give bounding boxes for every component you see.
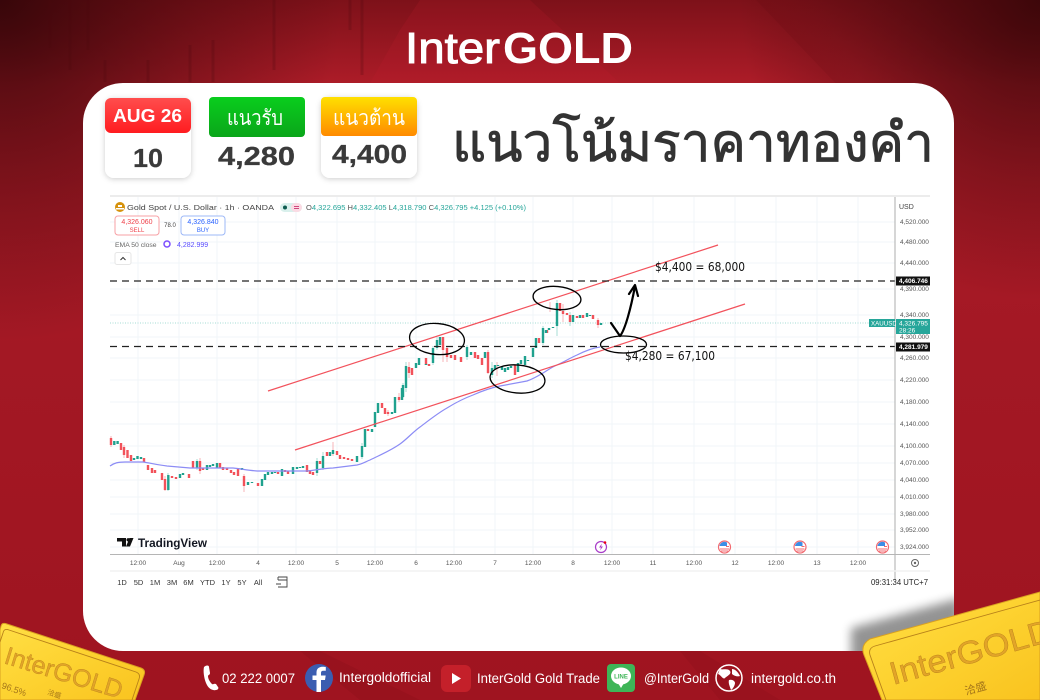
chart: gold price: [110, 195, 930, 587]
logo: InterGOLD: [405, 24, 633, 73]
logo: InterGOLD: Inter: [405, 24, 500, 73]
phone number: 02 222 0007: [222, 671, 295, 686]
time axis: 12:00: [604, 560, 621, 567]
price axis: XAUUSD: [871, 320, 897, 328]
legend: symbol and OHLC: [115, 202, 526, 212]
sell box: [115, 216, 159, 235]
time axis: Aug: [173, 560, 185, 567]
resistance dashed line: [110, 280, 895, 282]
time axis: 13: [813, 560, 821, 567]
time axis: 6: [414, 560, 418, 567]
footer: contact bar: [204, 664, 836, 692]
facebook handle: Intergoldofficial: [339, 670, 431, 685]
gold bar: right: InterGOLD: [885, 612, 1040, 692]
title: แนวโน้มราคาทองคำ: [452, 113, 934, 173]
candle bodies: bullish: [114, 303, 601, 490]
price axis: 4,220.000: [900, 377, 929, 384]
price axis: 4,281.979: [899, 344, 928, 351]
time axis: 12:00: [209, 560, 226, 567]
range selector: 1Y: [221, 578, 231, 587]
gold bar shadow: [844, 594, 954, 651]
price axis: 4,180.000: [900, 399, 929, 406]
icon: phone: [204, 666, 218, 690]
badge: support: แนวรับ: [227, 107, 283, 130]
badge: support: [209, 97, 305, 171]
buy box: 4,326.840: [187, 219, 219, 226]
price axis: [869, 197, 930, 580]
price axis: 4,340.000: [900, 312, 929, 319]
icon: facebook: [305, 664, 333, 692]
circled touch points: [408, 284, 646, 395]
price axis: 4,100.000: [900, 443, 929, 450]
legend: symbol and OHLC: Gold Spot / U.S. Dollar · 1h · OANDA: [127, 203, 275, 212]
collapse button: [115, 252, 131, 264]
line id: @InterGold: [644, 671, 709, 686]
youtube channel: InterGold Gold Trade: [477, 671, 600, 686]
candle bodies: bearish: [111, 303, 598, 490]
time axis: 12:00: [850, 560, 867, 567]
gold bar: right: 洽盛: [963, 679, 988, 698]
badge: resistance: 4,400: [332, 139, 407, 169]
price axis: 3,980.000: [900, 511, 929, 518]
EMA legend: 4,282.999: [177, 242, 208, 249]
badge: resistance: [321, 97, 417, 178]
icon: youtube: [441, 665, 471, 692]
support dashed line: [110, 346, 895, 348]
price axis: 4,406.746: [899, 278, 928, 285]
range selector: 1D: [117, 578, 127, 587]
price axis: 3,924.000: [900, 544, 929, 551]
badge: resistance: แนวต้าน: [333, 107, 405, 130]
label: support: $4,280 = 67,100: [625, 349, 715, 363]
range selector: 6M: [183, 578, 194, 587]
EMA legend: EMA 50 close: [115, 242, 157, 249]
range selector: [117, 577, 287, 587]
time axis: 12:00: [686, 560, 703, 567]
logo: InterGOLD: GOLD: [503, 24, 633, 73]
icon: globe: [716, 665, 742, 691]
badge: date: AUG 26: [113, 105, 182, 126]
sell box: 4,326.060: [121, 219, 153, 226]
price axis: 4,300.000: [900, 334, 929, 341]
candle wicks: [111, 300, 598, 492]
time axis: 12:00: [525, 560, 542, 567]
range selector: YTD: [200, 578, 216, 587]
time axis: 5: [335, 560, 339, 567]
icon: line: [607, 664, 635, 692]
gold bar: left: [0, 623, 145, 700]
price axis: 4,520.000: [900, 219, 929, 226]
gold bar: right: [863, 592, 1040, 700]
time axis: 12:00: [130, 560, 147, 567]
price axis: 28:26: [899, 328, 916, 334]
badge: date: [105, 98, 191, 178]
price axis: 4,480.000: [900, 239, 929, 246]
price axis: USD: [899, 204, 914, 211]
price axis: 4,326.795: [899, 320, 928, 328]
EMA line: [110, 347, 600, 471]
price line: [110, 322, 895, 324]
spread: 78.0: [164, 223, 176, 229]
time axis: 7: [493, 560, 497, 567]
trend channel: lower: [295, 304, 745, 450]
time axis: 12:00: [768, 560, 785, 567]
panel: white card: [83, 83, 954, 651]
time axis: 11: [650, 560, 657, 567]
gold bar: left: 96.5%: [0, 680, 28, 698]
buy box: BUY: [197, 228, 209, 234]
event icons: [596, 541, 888, 553]
label: resistance: $4,400 = 68,000: [655, 260, 745, 274]
legend: symbol and OHLC: O4,322.695 H4,332.405 L4,318.790 C4,326.795 +4.125 (+0.10%): [306, 203, 526, 212]
sell box: SELL: [130, 228, 145, 234]
clock: 09:31:34 UTC+7: [871, 578, 928, 587]
range selector: 3M: [167, 578, 177, 587]
price axis: 4,070.000: [900, 460, 929, 467]
icon: line: LINE: [614, 674, 628, 680]
time axis: 8: [571, 560, 575, 567]
badge: support: 4,280: [218, 141, 295, 171]
time axis: [110, 554, 930, 571]
buy box: [181, 216, 225, 235]
price axis: 4,260.000: [900, 355, 929, 362]
time axis: 12:00: [367, 560, 384, 567]
time axis: 12:00: [288, 560, 305, 567]
price axis: 4,010.000: [900, 494, 929, 501]
price axis: 4,140.000: [900, 421, 929, 428]
time axis: 12: [731, 560, 739, 567]
price axis: 4,390.000: [900, 286, 929, 293]
time axis: 4: [256, 560, 260, 567]
time axis: 12:00: [446, 560, 463, 567]
website: intergold.co.th: [751, 671, 836, 686]
TradingView logo: TradingView: [138, 536, 208, 550]
range selector: 5Y: [237, 578, 247, 587]
badge: date: 10: [133, 143, 163, 173]
price axis: 3,952.000: [900, 527, 929, 534]
range selector: 1M: [150, 578, 160, 587]
trend channel: upper: [268, 245, 718, 391]
EMA legend: [115, 241, 208, 249]
price axis: 4,440.000: [900, 260, 929, 267]
range selector: All: [254, 578, 262, 587]
range selector: 5D: [134, 578, 144, 587]
price axis: 4,040.000: [900, 477, 929, 484]
arrow: bounce to resistance: [611, 285, 638, 336]
